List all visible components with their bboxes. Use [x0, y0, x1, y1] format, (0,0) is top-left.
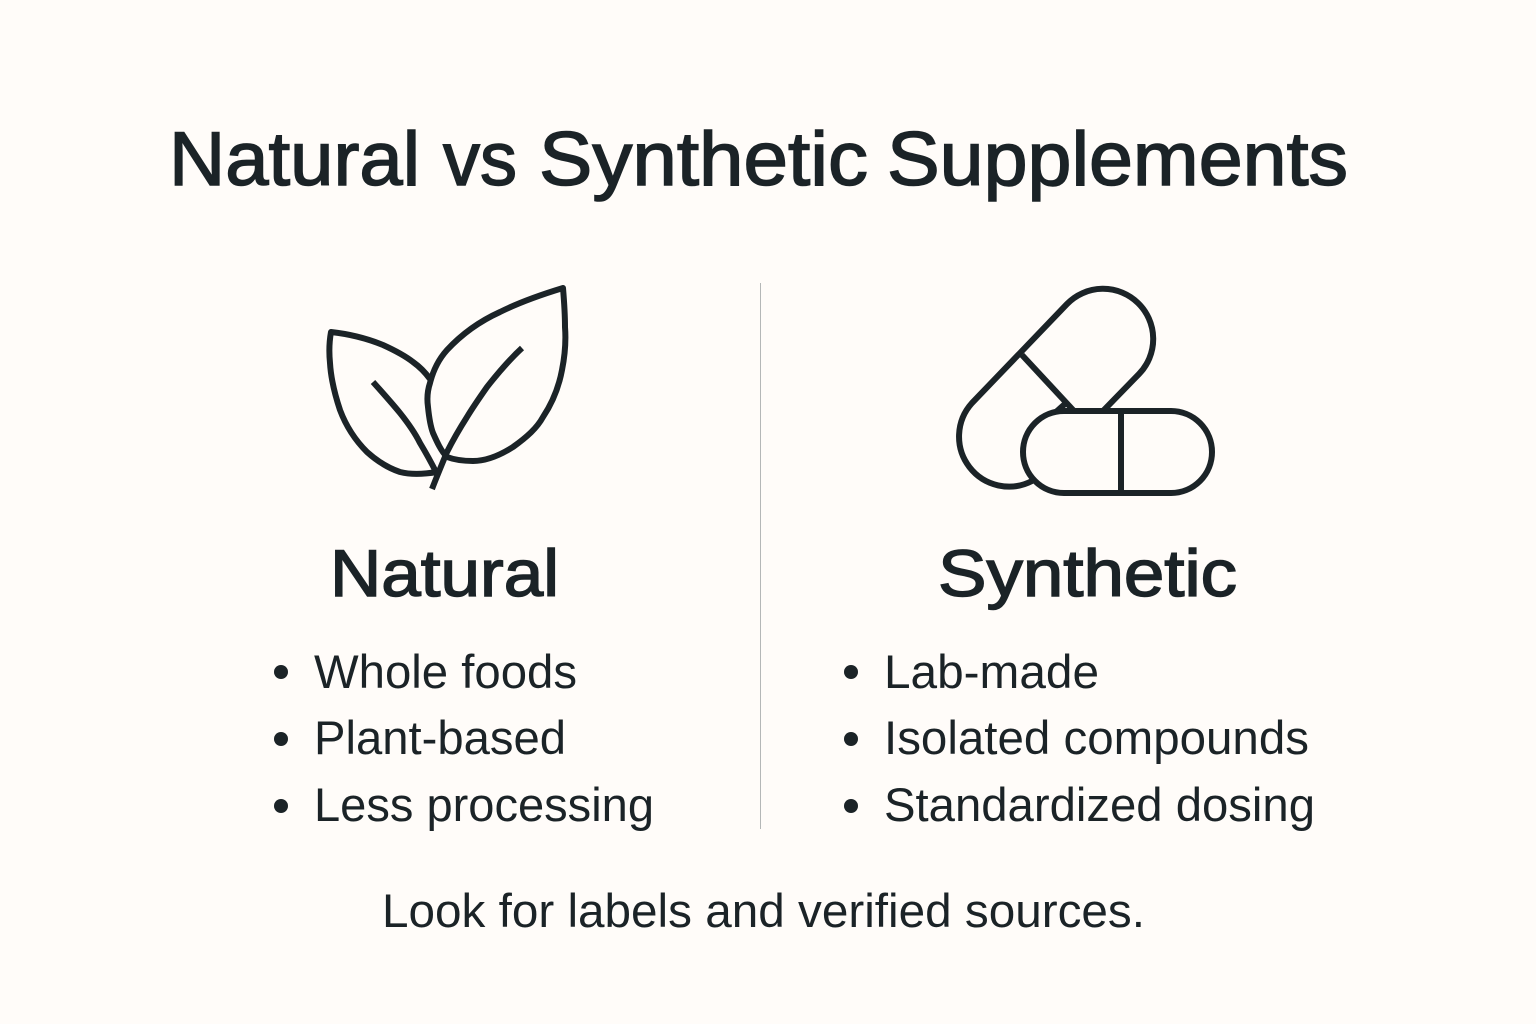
title: Synthetic [539, 117, 868, 202]
list: synthetic points: Standardized dosing [884, 778, 1315, 831]
panel: natural [274, 288, 654, 831]
list: natural points [274, 645, 654, 831]
heading: synthetic: Synthetic [938, 536, 1237, 610]
list: natural points: Less processing [314, 778, 654, 831]
icon: leaves [329, 288, 565, 489]
icon: capsules [959, 289, 1212, 493]
panel: synthetic [844, 289, 1315, 831]
heading: natural: Natural [330, 536, 559, 610]
list: synthetic points [844, 645, 1315, 831]
list: natural points: Whole foods [314, 645, 577, 698]
footer note: Look for labels and verified sources. [382, 884, 1145, 937]
title [169, 117, 1348, 202]
title: Supplements [887, 117, 1348, 202]
list: synthetic points: Isolated compounds [884, 711, 1309, 764]
list: natural points: Plant-based [314, 711, 566, 764]
list: synthetic points: Lab-made [884, 645, 1099, 698]
title: Natural [169, 117, 420, 202]
title: vs [443, 117, 517, 202]
